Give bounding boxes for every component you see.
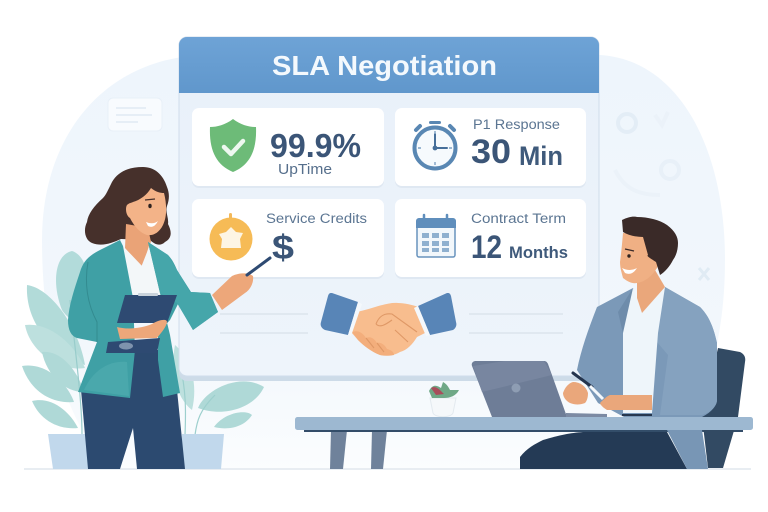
value: 12 Months: 12: [471, 229, 502, 265]
face: [126, 188, 166, 235]
panel: SLA dashboard: [179, 37, 599, 381]
card: service credits: [192, 199, 384, 277]
hand on clipboard: [117, 320, 167, 339]
icon: green shield: [210, 119, 256, 172]
label: contract term: Contract Term: [471, 211, 566, 226]
card: contract term: Months: [509, 243, 568, 262]
decorative faint icons: [108, 98, 709, 280]
background blob: [24, 55, 751, 470]
shirt: [623, 287, 665, 413]
icon: calendar: [416, 215, 456, 257]
chair: [702, 348, 745, 468]
value: 30 Min: 30: [471, 133, 511, 171]
card shadows: [192, 109, 586, 279]
value: 99.9%: 99.9%: [270, 127, 361, 164]
head: [620, 233, 660, 283]
label: P1 Response: P1 Response: [473, 117, 560, 132]
jacket lower: [667, 430, 708, 469]
title: SLA Negotiation: [272, 50, 497, 81]
table top: [295, 417, 753, 430]
pen: [247, 258, 270, 275]
icon: handshake: [321, 293, 456, 356]
clipboard: [117, 295, 177, 323]
plant bowl on table: [429, 382, 459, 417]
neck: [637, 270, 665, 313]
neck: [125, 224, 151, 270]
icon: gold medal: [210, 213, 252, 260]
hair: [85, 167, 171, 245]
card: contract term: [395, 199, 586, 277]
jacket: [577, 287, 717, 417]
plants and pots behind presenter: [22, 251, 264, 469]
trousers: [81, 390, 185, 469]
card: P1 response: Min: [519, 141, 563, 171]
legs: [520, 432, 687, 469]
card: P1 response: [395, 108, 586, 186]
seated man: [472, 217, 745, 469]
white blouse: [123, 242, 162, 296]
label: service credits: Service Credits: [266, 211, 367, 226]
hands and pen: [563, 382, 588, 404]
label: uptime: UpTime: [278, 161, 332, 178]
teal jacket: [68, 240, 135, 398]
card: uptime: [192, 108, 384, 186]
laptop: [472, 361, 567, 417]
table legs: [304, 429, 743, 469]
header bar: [179, 37, 599, 93]
icon: stopwatch: [414, 121, 456, 168]
pointing forearm and hand: [212, 273, 253, 310]
presenter woman: [68, 167, 270, 469]
value: dollar sign: $: [272, 229, 294, 267]
placeholder lines: [220, 314, 563, 333]
